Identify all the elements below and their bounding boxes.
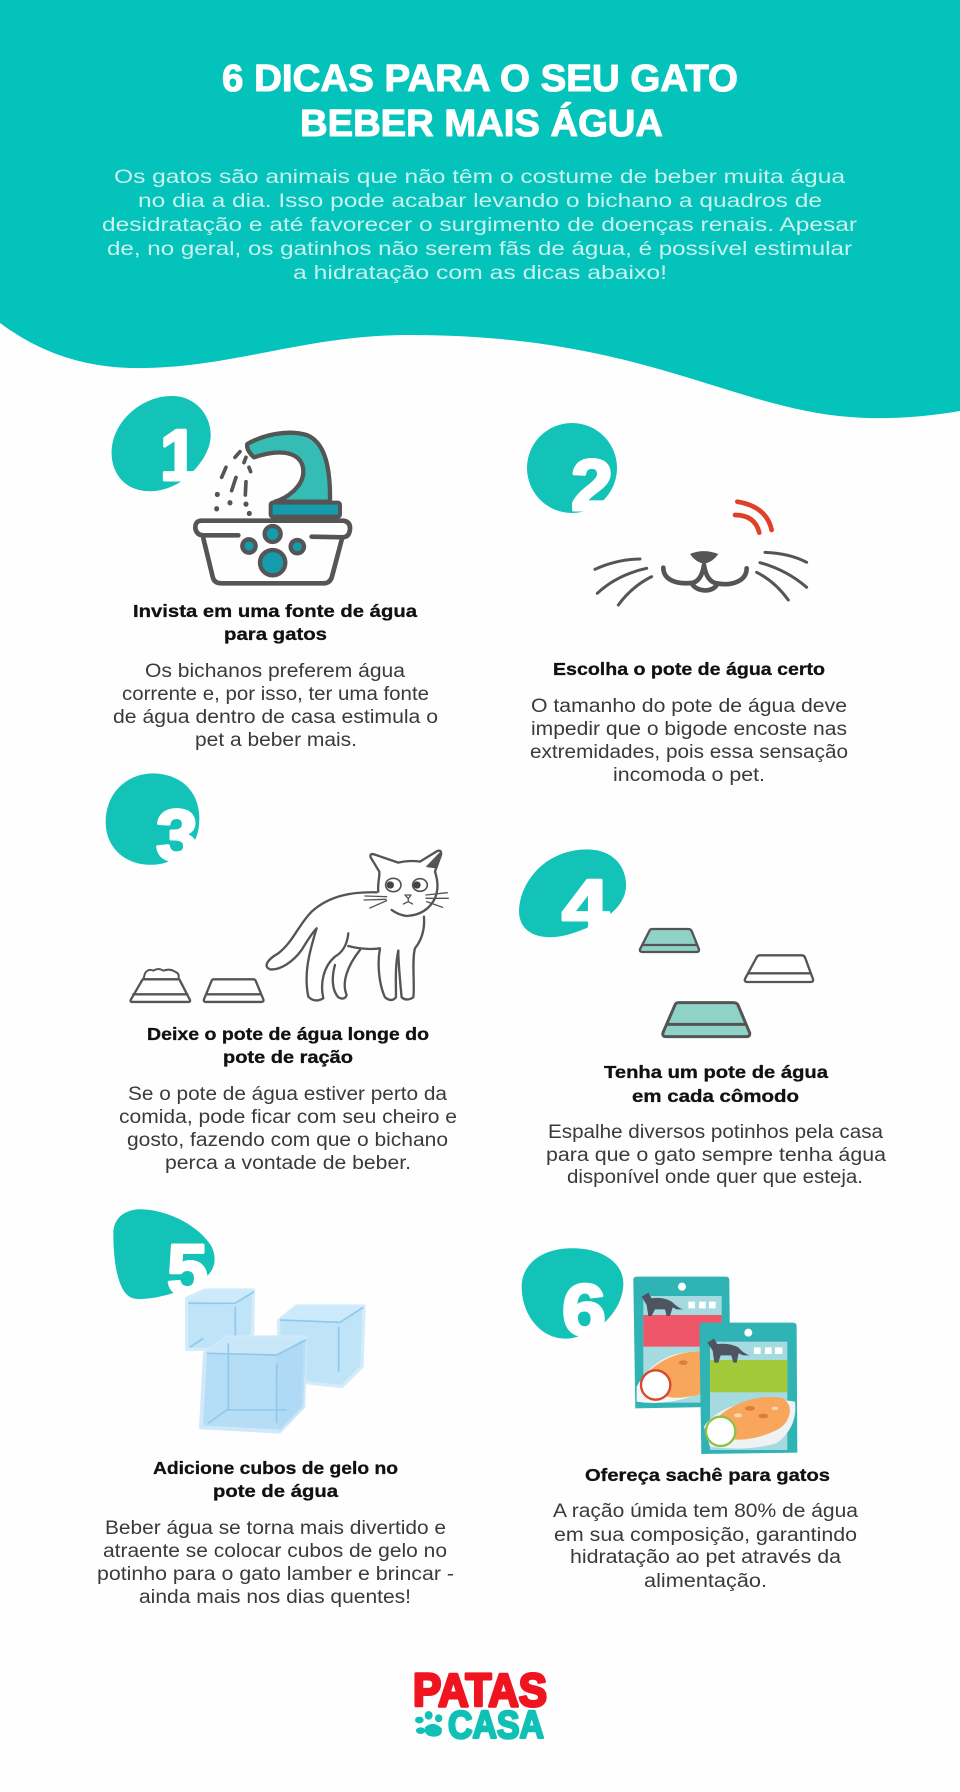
badge 2: 2: [571, 446, 613, 526]
food bowl: [131, 969, 190, 1002]
body tip 3: gosto, fazendo com que o bichano: [127, 1130, 448, 1151]
body tip 2: impedir que o bigode encoste nas: [531, 719, 847, 740]
intro text: de, no geral, os gatinhos não serem fãs de água, é possível estimular: [107, 238, 853, 260]
cat: [267, 851, 448, 1000]
body tip 4: Espalhe diversos potinhos pela casa: [548, 1122, 883, 1143]
badge 1: [112, 396, 211, 496]
intro text: a hidratação com as dicas abaixo!: [293, 262, 667, 284]
intro text: Os gatos são animais que não têm o costume de beber muita água: [114, 166, 845, 188]
body tip 1: de água dentro de casa estimula o: [113, 707, 438, 728]
badge 1: 1: [160, 416, 198, 496]
body tip 1: Os bichanos preferem água: [145, 661, 405, 682]
panel: tip 6: [522, 1248, 858, 1592]
panel: tip 3: [106, 773, 457, 1174]
front sachet: [699, 1323, 797, 1454]
heading tip 2: Escolha o pote de água certo: [553, 659, 825, 679]
body tip 6: em sua composição, garantindo: [554, 1525, 857, 1546]
badge 5: 5: [167, 1231, 208, 1311]
heading tip 4: Tenha um pote de água: [604, 1062, 828, 1082]
heading tip 5: [153, 1458, 398, 1501]
badge 4: [519, 849, 626, 946]
body tip 4: disponível onde quer que esteja.: [567, 1167, 863, 1188]
body tip 2: [530, 696, 848, 786]
body tip 6: A ração úmida tem 80% de água: [553, 1501, 858, 1522]
back left cube: [187, 1290, 254, 1349]
heading tip 1: para gatos: [224, 624, 327, 644]
badge 6: [522, 1248, 623, 1351]
badge 4: 4: [562, 866, 609, 946]
body tip 4: [546, 1122, 886, 1188]
badge 6: 6: [562, 1271, 606, 1351]
title: BEBER MAIS ÁGUA: [300, 101, 663, 145]
back sachet: [633, 1277, 731, 1408]
heading tip 5: pote de água: [213, 1481, 338, 1501]
body tip 1: corrente e, por isso, ter uma fonte: [122, 684, 429, 705]
heading tip 4: [604, 1062, 828, 1106]
body tip 5: ainda mais nos dias quentes!: [139, 1587, 411, 1608]
body tip 1: pet a beber mais.: [195, 730, 357, 751]
intro text: desidratação e até favorecer o surgimento de doenças renais. Apesar: [102, 214, 858, 236]
icon: paw: [415, 1711, 442, 1737]
body tip 1: [113, 661, 438, 751]
heading tip 1: Invista em uma fonte de água: [133, 601, 417, 621]
icon: wet food sachets: [633, 1277, 797, 1454]
body tip 2: incomoda o pet.: [613, 765, 765, 786]
body tip 5: Beber água se torna mais divertido e: [105, 1518, 446, 1539]
body tip 2: extremidades, pois essa sensação: [530, 742, 848, 763]
body tip 5: atraente se colocar cubos de gelo no: [103, 1541, 447, 1562]
heading tip 5: Adicione cubos de gelo no: [153, 1458, 398, 1478]
body tip 5: potinho para o gato lamber e brincar -: [97, 1564, 454, 1585]
heading tip 1: [133, 601, 417, 644]
body tip 3: [119, 1084, 457, 1174]
body tip 3: comida, pode ficar com seu cheiro e: [119, 1107, 457, 1128]
icon: three water bowls: [640, 929, 813, 1037]
logo: Patas da Casa: CASA: [448, 1704, 544, 1747]
body tip 6: alimentação.: [644, 1571, 767, 1592]
badge 3: [106, 773, 199, 876]
body tip 6: [553, 1501, 858, 1592]
panel: tip 5: [97, 1209, 454, 1608]
heading tip 3: Deixe o pote de água longe do: [147, 1024, 429, 1044]
intro text: no dia a dia. Isso pode acabar levando o bichano a quadros de: [138, 190, 822, 212]
title: 6 DICAS PARA O SEU GATO: [222, 58, 738, 100]
heading tip 3: pote de ração: [223, 1047, 353, 1067]
heading tip 3: [147, 1024, 429, 1067]
front cube: [201, 1337, 306, 1432]
heading tip 4: em cada cômodo: [632, 1086, 799, 1106]
back right cube: [278, 1306, 364, 1387]
badge 3: 3: [156, 796, 198, 876]
body tip 2: O tamanho do pote de água deve: [531, 696, 847, 717]
intro text: [102, 166, 858, 284]
logo: Patas da Casa: [413, 1664, 547, 1747]
body tip 5: [97, 1518, 454, 1608]
body tip 4: para que o gato sempre tenha água: [546, 1145, 886, 1166]
icon: cat and bowls: [131, 851, 448, 1002]
badge 5: [113, 1209, 215, 1311]
heading tip 6: Ofereça sachê para gatos: [585, 1465, 830, 1485]
body tip 3: Se o pote de água estiver perto da: [128, 1084, 447, 1105]
panel: tip 2: [527, 423, 848, 786]
badge 2: [527, 423, 617, 526]
icon: water fountain: [195, 433, 350, 583]
icon: cat whiskers: [595, 502, 807, 605]
title: [222, 58, 738, 145]
logo: Patas da Casa: PATAS: [413, 1664, 547, 1716]
body tip 3: perca a vontade de beber.: [165, 1153, 411, 1174]
panel: tip 4: [519, 849, 886, 1188]
icon: ice cubes: [187, 1290, 364, 1432]
water bowl: [204, 979, 263, 1002]
body tip 6: hidratação ao pet através da: [570, 1547, 841, 1568]
header wave background: [0, 0, 960, 418]
panel: tip 1: [112, 396, 438, 751]
